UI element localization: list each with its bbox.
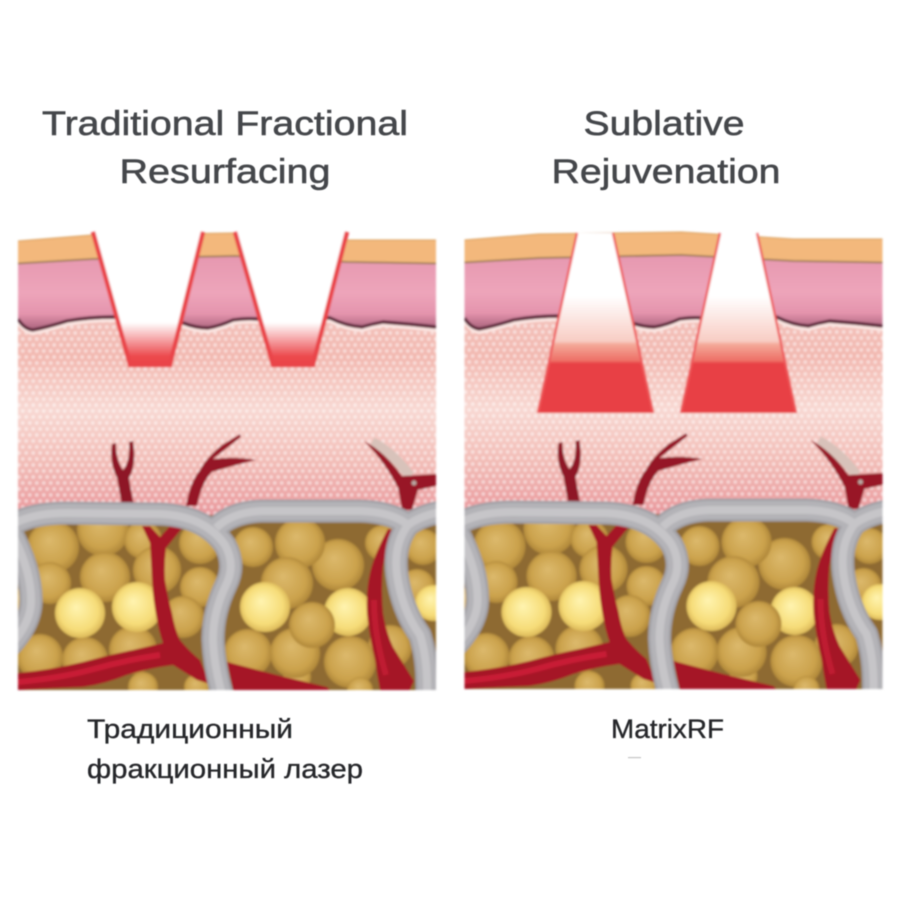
grey connective septa <box>8 511 440 694</box>
title: Sublative Rejuvenation: Sublative <box>584 105 744 143</box>
notch two edges <box>235 232 347 365</box>
fat cells <box>16 514 438 692</box>
wedge two edges <box>681 233 796 412</box>
wedge one edges <box>538 233 653 412</box>
caption: MatrixRF <box>611 714 724 758</box>
ablative notch two <box>235 232 347 367</box>
fat cells <box>462 513 884 691</box>
ablative notch one <box>93 232 203 367</box>
caption: traditional fractional laser in Russian: фракционный лазер <box>87 754 363 784</box>
title: Traditional Fractional Resurfacing: Traditional Fractional <box>42 105 408 143</box>
panel: traditional fractional skin diagram <box>8 232 451 703</box>
pink skin layer <box>464 255 882 332</box>
caption: MatrixRF: MatrixRF <box>611 714 724 744</box>
dermis layer <box>464 314 882 524</box>
dermis layer <box>18 315 436 525</box>
title: Sublative Rejuvenation: Rejuvenation <box>552 153 780 191</box>
notch one edges <box>93 232 203 365</box>
title: Traditional Fractional Resurfacing <box>42 105 408 191</box>
grey connective septa <box>454 510 886 693</box>
caption: traditional fractional laser in Russian: Традиционный <box>87 714 293 744</box>
blood vessels <box>464 433 882 689</box>
orange epidermis layer <box>18 233 436 264</box>
title: Traditional Fractional Resurfacing: Resurfacing <box>120 153 330 191</box>
pink skin layer <box>18 256 436 334</box>
panel: sublative rejuvenation skin diagram <box>454 232 898 702</box>
orange epidermis layer <box>464 232 882 263</box>
sublative wedge one <box>537 233 654 413</box>
caption: traditional fractional laser in Russian <box>87 714 363 784</box>
sublative wedge two <box>680 233 797 413</box>
title: Sublative Rejuvenation <box>552 105 780 191</box>
blood vessels <box>18 434 436 690</box>
